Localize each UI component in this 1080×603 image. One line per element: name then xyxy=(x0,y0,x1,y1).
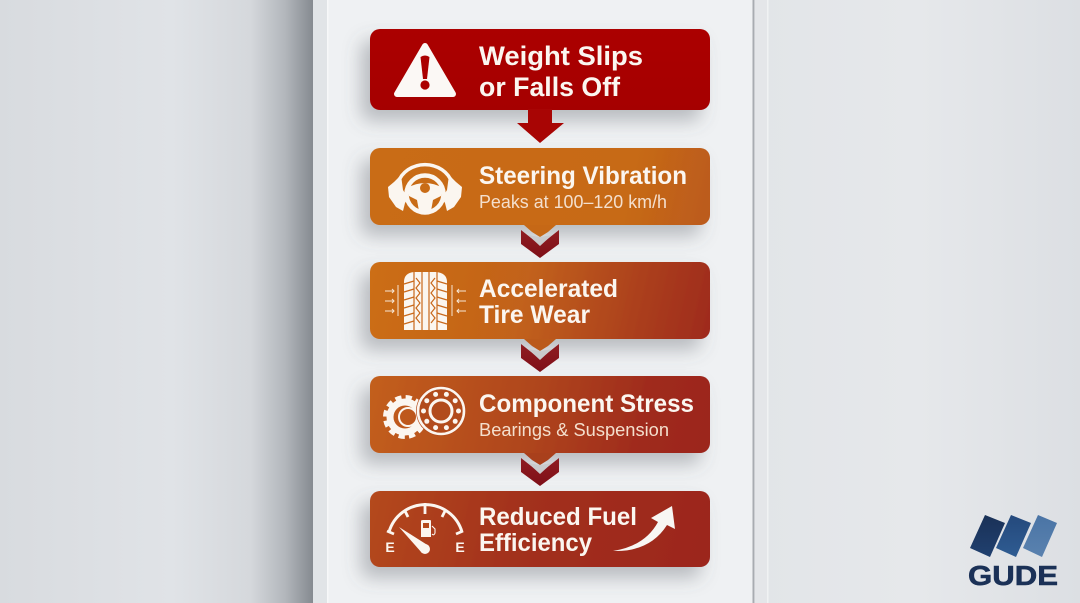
card 5: Reduced Fuel Efficiency xyxy=(370,491,710,567)
icon: fuel gauge near empty: E xyxy=(385,539,395,555)
heading: Steering Vibration: Steering Vibration xyxy=(479,162,687,190)
icon: hands on steering wheel xyxy=(388,165,462,212)
background wall: right xyxy=(755,0,1080,603)
icon: curved upward arrow xyxy=(613,506,675,551)
heading: Reduced Fuel Efficiency: Efficiency xyxy=(479,529,592,557)
heading: Component Stress: Component Stress xyxy=(479,390,694,418)
card 3: Accelerated Tire Wear xyxy=(370,262,710,339)
heading: Weight Slips or Falls Off: Weight Slips xyxy=(479,41,643,71)
logo: GUDE xyxy=(968,515,1058,591)
arrow: chevron 3 xyxy=(521,453,559,486)
arrow: solid red down arrow xyxy=(517,109,564,143)
subtext: Peaks at 100–120 km/h: Peaks at 100–120 km/h xyxy=(479,192,667,212)
heading: Accelerated Tire Wear: Tire Wear xyxy=(479,301,590,329)
icon: fuel gauge near empty: E xyxy=(455,539,465,555)
logo wordmark: GUDE xyxy=(968,560,1058,591)
card 1: Weight Slips or Falls Off xyxy=(370,29,710,110)
logo mark: three slanted bars xyxy=(970,515,1057,557)
arrow: chevron 2 xyxy=(521,339,559,372)
subtext: Bearings & Suspension: Bearings & Suspension xyxy=(479,420,669,440)
icon: fuel gauge near empty xyxy=(385,503,465,555)
heading: Weight Slips or Falls Off: or Falls Off xyxy=(479,72,621,102)
icon: gear and ball bearing xyxy=(386,386,466,436)
heading: Reduced Fuel Efficiency: Reduced Fuel xyxy=(479,503,637,531)
icon: warning triangle xyxy=(397,46,453,94)
icon: tire tread with side arrows xyxy=(385,272,466,330)
heading: Reduced Fuel Efficiency xyxy=(479,503,637,557)
card 2: Steering Vibration xyxy=(370,148,710,225)
heading: Accelerated Tire Wear: Accelerated xyxy=(479,275,618,303)
background wall: left xyxy=(0,0,313,603)
heading: Weight Slips or Falls Off xyxy=(479,41,643,102)
arrow: chevron 1 xyxy=(521,225,559,258)
card 4: Component Stress xyxy=(370,376,710,453)
panel: white vertical board xyxy=(313,0,768,603)
heading: Accelerated Tire Wear xyxy=(479,275,618,329)
